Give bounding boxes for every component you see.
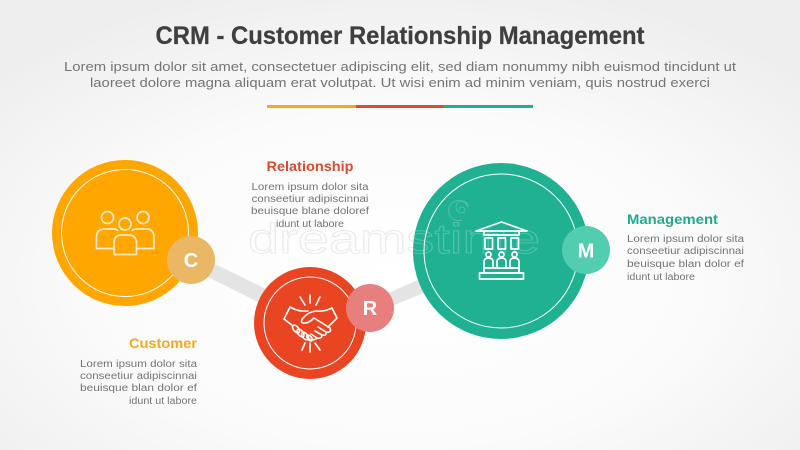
- label: customer: [80, 335, 198, 407]
- label: customer: Customer: [129, 335, 198, 351]
- text: dreamstime: [248, 215, 540, 262]
- intro text: [64, 59, 736, 90]
- icon: people: [96, 212, 154, 254]
- circle: customer: [52, 160, 198, 306]
- badge: M: M: [578, 240, 594, 262]
- badge: R: R: [363, 298, 378, 320]
- label: customer: idunt ut labore: [129, 396, 197, 407]
- label: relationship: Lorem ipsum dolor sita: [252, 182, 369, 193]
- label: customer: Lorem ipsum dolor sita: [80, 359, 198, 370]
- icon: handshake: [284, 295, 337, 352]
- label: relationship: [251, 158, 369, 230]
- label: relationship: idunt ut labore: [276, 219, 344, 230]
- text: dreamstime: [248, 215, 540, 262]
- badge: C: [167, 236, 215, 284]
- connector: relationship to management: [386, 279, 426, 306]
- badge: M: [562, 226, 610, 274]
- connector: customer to relationship: [208, 264, 268, 303]
- intro text: Lorem ipsum dolor sit amet, consectetuer adipiscing elit, sed diam nonummy nibh euismod tincidunt ut: [64, 59, 736, 74]
- label: customer: conseetiur adipiscinnai: [80, 371, 197, 382]
- badge: R: [346, 284, 394, 332]
- icon: institution: [476, 222, 527, 279]
- badge: C: C: [184, 250, 198, 272]
- label: management: Lorem ipsum dolor sita: [627, 234, 745, 245]
- label: management: Management: [627, 211, 718, 227]
- label: relationship: beuisque blane doloref: [251, 206, 369, 217]
- label: relationship: Relationship: [266, 158, 354, 174]
- label: management: idunt ut labore: [627, 272, 695, 283]
- intro text: laoreet dolore magna aliquam erat volutpat. Ut wisi enim ad minim veniam, quis nostrud exerci: [90, 75, 710, 90]
- label: customer: beuisque blan dolor ef: [80, 383, 197, 394]
- circle: management: [413, 163, 589, 339]
- circle: relationship: [254, 267, 366, 379]
- label: management: conseetiur adipiscinnai: [627, 246, 744, 257]
- label: management: [627, 211, 745, 283]
- label: management: beuisque blan dolor ef: [627, 259, 744, 270]
- title: CRM - Customer Relationship Management: [156, 22, 645, 50]
- label: relationship: conseetiur adipiscinnai: [252, 194, 368, 205]
- tricolor divider: [267, 105, 533, 108]
